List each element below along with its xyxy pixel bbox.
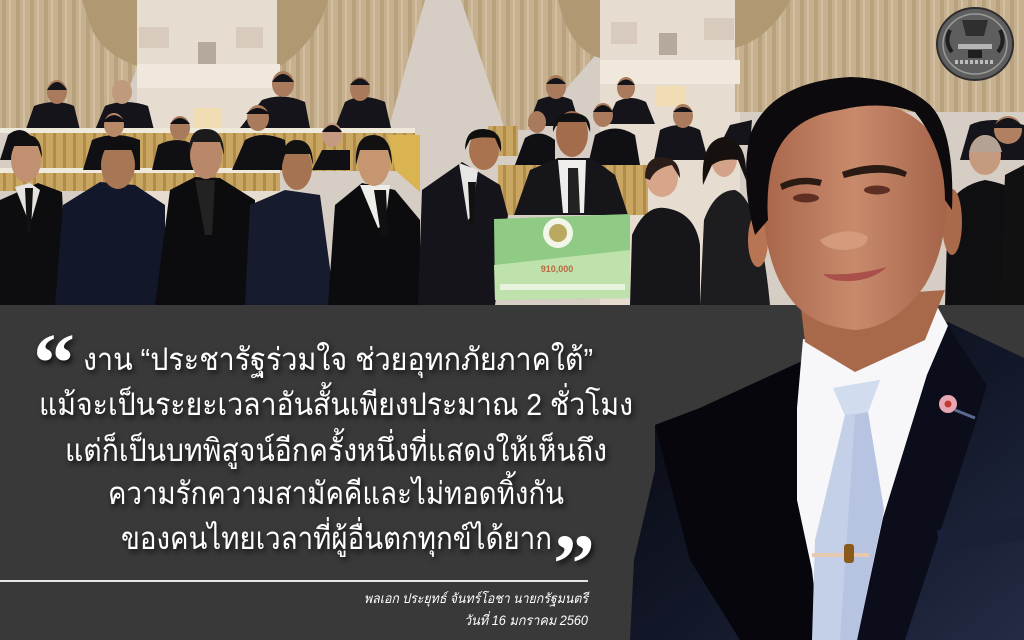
icon: government seal <box>937 8 1013 80</box>
closing quote mark: ” <box>553 518 595 611</box>
donation board 910,000: 910,000 <box>541 264 573 274</box>
suit pocket <box>937 515 1024 552</box>
tie <box>812 380 884 640</box>
nose <box>820 231 867 250</box>
opening quote mark: “ <box>33 317 75 410</box>
shirt <box>797 306 948 640</box>
portrait: prime minister <box>630 77 1024 640</box>
speaker name: พลเอก ประยุทธ์ จันทร์โอชา นายกรัฐมนตรี <box>364 590 590 607</box>
quote text block <box>33 317 633 611</box>
mouth <box>823 267 887 281</box>
eyebrows and eyes <box>780 165 907 202</box>
quote line 5: ของคนไทยเวลาที่ผู้อื่นตกทุกข์ได้ยาก <box>121 517 552 558</box>
middle row seated people <box>0 103 640 170</box>
neck <box>800 290 945 372</box>
ears <box>748 213 768 267</box>
quote line 3: แต่ก็เป็นบทพิสูจน์อีกครั้งหนึ่งที่แสดงให้เห็นถึง <box>65 428 607 469</box>
right lapel <box>857 326 987 640</box>
lapel pin <box>939 395 975 418</box>
date: วันที่ 16 มกราคม 2560 <box>464 611 588 628</box>
face <box>762 100 946 330</box>
attribution <box>364 590 590 628</box>
gold skirted tables <box>0 126 648 215</box>
guests on the right of the board <box>630 135 1024 305</box>
suit <box>630 322 1024 640</box>
attribution rule <box>0 580 588 582</box>
tie clip <box>812 553 869 557</box>
quote line 4: ความรักความสามัคคีและไม่ทอดทิ้งกัน <box>108 471 564 511</box>
panel: dark quote background <box>0 305 1024 640</box>
donation board 910,000 <box>494 214 630 300</box>
seated staff, back row <box>25 71 1024 160</box>
front row dignitaries <box>0 111 628 305</box>
hair <box>746 77 952 235</box>
quote line 1: งาน “ประชารัฐร่วมใจ ช่วยอุทกภัยภาคใต้” <box>83 342 593 379</box>
photo: event hall with donation ceremony <box>0 0 1024 305</box>
quote line 2: แม้จะเป็นระยะเวลาอันสั้นเพียงประมาณ 2 ชั่วโมง <box>39 382 633 422</box>
hall background <box>0 0 1024 305</box>
